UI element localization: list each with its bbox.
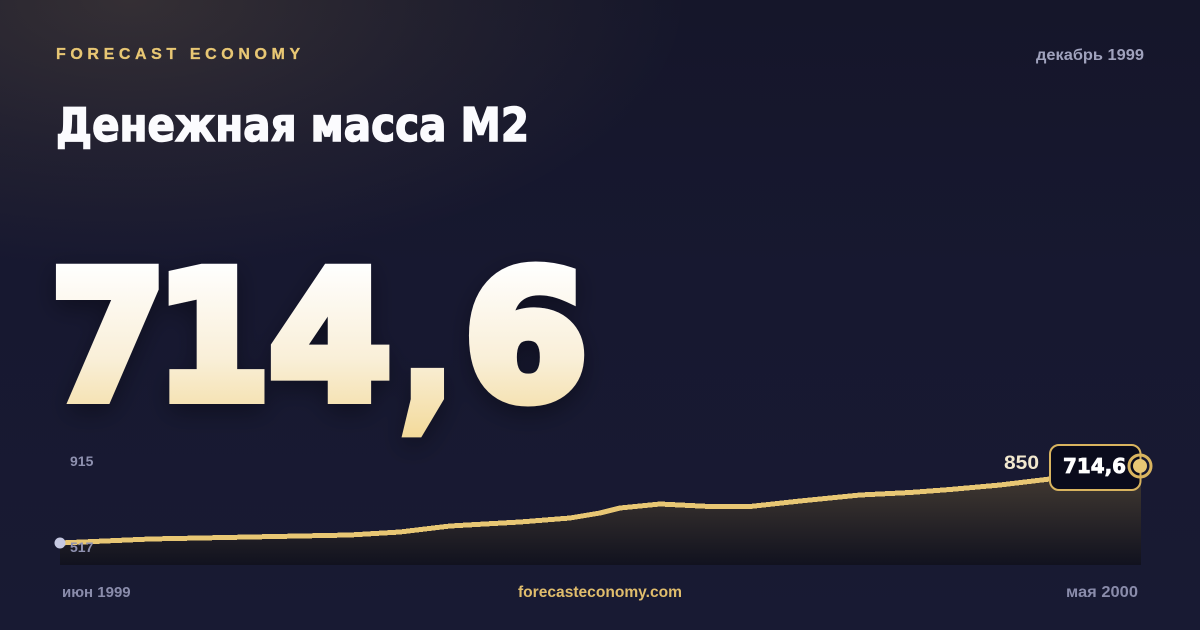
website: forecasteconomy.com xyxy=(518,584,682,601)
big value: 4 xyxy=(269,235,391,440)
big value: , xyxy=(392,214,463,458)
date label: декабрь 1999 xyxy=(1036,47,1144,64)
axis max: 915 xyxy=(70,453,94,469)
title: Денежная масса М2 xyxy=(56,98,529,152)
brand label: FORECAST ECONOMY xyxy=(56,46,305,63)
end date: мая 2000 xyxy=(1066,584,1138,601)
chart xyxy=(54,445,1151,565)
chart line xyxy=(60,479,1050,543)
big value: 1 xyxy=(156,236,270,440)
end marker xyxy=(1129,455,1151,477)
start date: июн 1999 xyxy=(62,584,131,601)
start dot xyxy=(54,538,66,548)
value chip: 714,6 xyxy=(1063,454,1126,478)
big value: 6 xyxy=(464,235,588,440)
chart area xyxy=(60,466,1141,565)
peak label: 850 xyxy=(1004,453,1039,474)
axis min: 517 xyxy=(70,539,94,555)
big value: 7 xyxy=(50,236,166,440)
big value xyxy=(50,214,588,458)
value chip xyxy=(1050,445,1140,490)
